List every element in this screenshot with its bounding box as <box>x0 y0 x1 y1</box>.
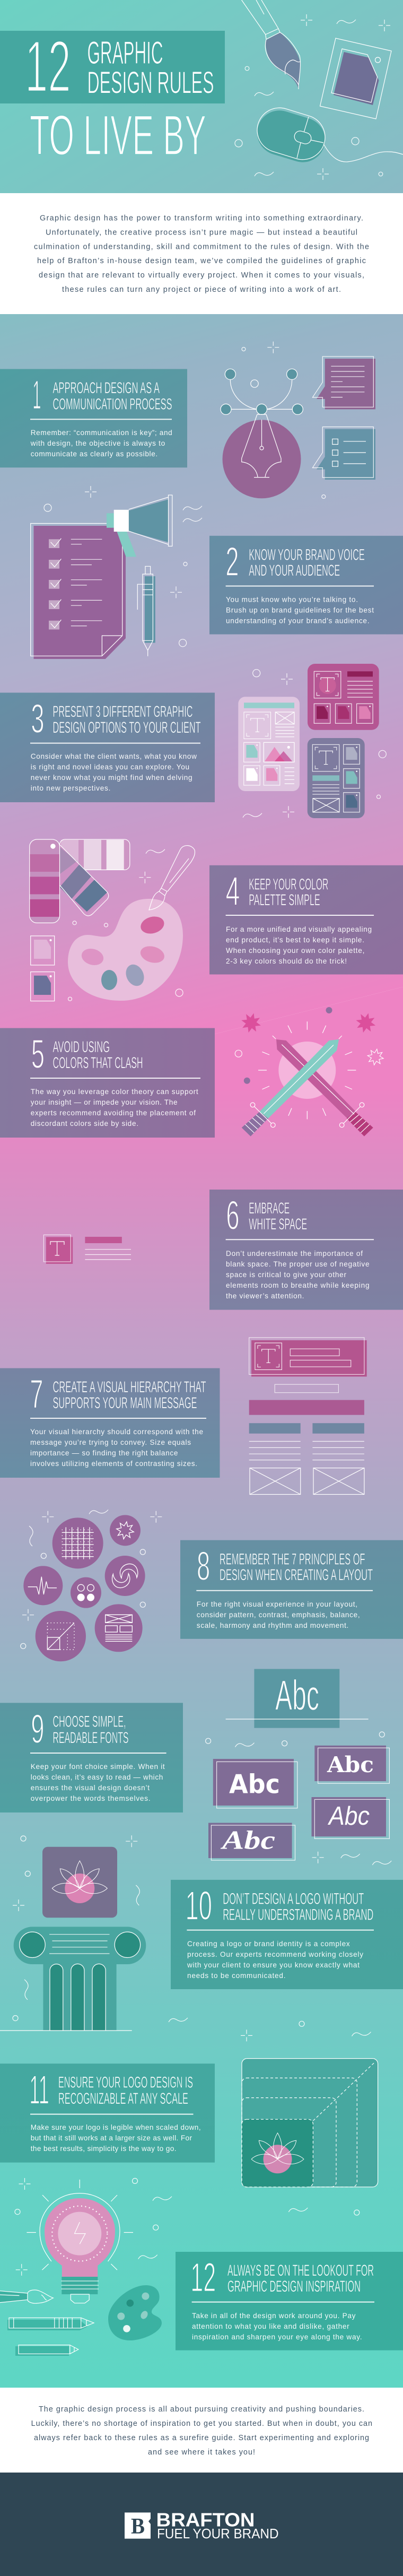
panel background <box>0 1028 215 1138</box>
panel background <box>180 1540 403 1639</box>
main gradient background, upper part <box>0 314 403 1088</box>
body text: looks clean, it’s easy to read — which <box>31 1773 163 1781</box>
icon: header paintbrush <box>242 0 301 89</box>
body text: Remember: “communication is key”; and <box>31 429 172 437</box>
heading: KEEP YOUR COLOR <box>249 875 328 894</box>
panel background <box>209 536 403 635</box>
heading: APPROACH DESIGN AS A <box>53 379 160 397</box>
icon: bottom paintbrush <box>0 2290 53 2303</box>
footer <box>0 2473 403 2576</box>
body text: space is critical to give your other <box>226 1271 346 1279</box>
heading <box>223 1890 373 1923</box>
icon: megaphone <box>107 495 172 557</box>
heading <box>53 703 200 736</box>
heading: RECOGNIZABLE AT ANY SCALE <box>58 2090 188 2107</box>
body text: is right and novel ideas you can explore. You <box>31 763 189 771</box>
title line design rules: DESIGN RULES <box>87 66 214 100</box>
number 4: 4 <box>226 869 240 914</box>
icon: pencils <box>7 2318 94 2356</box>
number 8: 8 <box>197 1543 210 1589</box>
panel background <box>209 865 403 974</box>
icon: font sample cards <box>208 1746 389 1860</box>
panel background <box>176 2252 403 2351</box>
heading: PALETTE SIMPLE <box>249 891 320 909</box>
number 12: 12 <box>190 2255 216 2301</box>
decor: header sparkles <box>235 14 390 180</box>
icon: light bulb <box>27 2180 133 2303</box>
heading <box>53 1713 128 1747</box>
icon: small swatch cards <box>31 936 55 1001</box>
decor: rule 10 sparkles <box>13 1835 371 2041</box>
heading: AVOID USING <box>53 1038 110 1056</box>
panel: rule 9 <box>0 1703 183 1812</box>
heading: DESIGN OPTIONS TO YOUR CLIENT <box>53 719 200 736</box>
title band <box>0 31 225 103</box>
body text <box>197 1600 360 1629</box>
heading <box>58 2074 193 2107</box>
main gradient background, lower part <box>0 987 403 2388</box>
body text: understanding of your brand’s audience. <box>226 617 369 625</box>
closing text: Luckily, there’s no shortage of inspiration to get you started. But when in doubt, you can <box>31 2419 372 2428</box>
heading <box>249 1200 307 1233</box>
icon: font sample cards: Abc <box>229 1770 280 1800</box>
icon: layout card light <box>238 697 300 791</box>
heading <box>220 1550 373 1584</box>
icon: header mouse <box>252 102 403 168</box>
icon: crossed pencils <box>242 1021 373 1137</box>
heading: ENSURE YOUR LOGO DESIGN IS <box>58 2074 193 2092</box>
body text <box>31 1763 165 1802</box>
icon: checklist document <box>31 523 126 659</box>
heading: CHOOSE SIMPLE, <box>53 1713 126 1731</box>
body text: Don’t underestimate the importance of <box>226 1250 363 1257</box>
heading: COLORS THAT CLASH <box>53 1054 143 1072</box>
panel background <box>0 1368 220 1478</box>
body text: needs to be communicated. <box>187 1972 285 1980</box>
body text: your insight — or impede your vision. The <box>31 1098 177 1106</box>
body text: Creating a logo or brand identity is a complex <box>187 1940 350 1948</box>
icon: seven design principles <box>23 1515 145 1661</box>
footer background <box>0 2473 403 2576</box>
decor: rule 12 sparkles <box>15 2178 172 2276</box>
closing text: and see where it takes you! <box>148 2448 255 2457</box>
closing text: The graphic design process is all about pursuing creativity and pushing boundaries. <box>39 2405 364 2414</box>
panel: rule 10 <box>171 1880 403 1989</box>
brafton tagline: FUEL YOUR BRAND <box>157 2527 279 2542</box>
panel: rule 7 <box>0 1368 220 1478</box>
body text: blank space. The proper use of negative <box>226 1260 369 1268</box>
body text: message you’re trying to convey. Size equals <box>30 1438 191 1446</box>
body text <box>226 596 374 625</box>
decor: rule 11 sparkles <box>288 2208 360 2215</box>
body text <box>31 2123 201 2153</box>
number 3: 3 <box>31 696 45 742</box>
body text: experts recommend avoiding the placement of <box>31 1109 196 1117</box>
heading: PRESENT 3 DIFFERENT GRAPHIC <box>53 703 193 721</box>
icon: lotus logo card <box>42 1847 117 1918</box>
body text: The way you leverage color theory can support <box>31 1088 198 1096</box>
intro text: Unfortunately, the creative process isn’t pure magic — but instead a beautiful <box>46 228 357 237</box>
title line graphic: GRAPHIC <box>87 35 163 71</box>
decor: stars and dots <box>235 1007 383 1084</box>
decor: rule 9 sparkles <box>206 1732 391 1865</box>
heading <box>249 547 365 579</box>
decor: rule 4 sparkles <box>68 849 183 1001</box>
number 2: 2 <box>225 539 239 585</box>
title number 12: 12 <box>25 26 71 108</box>
body text: importance — so finding the right balance <box>30 1449 178 1457</box>
icon: font sample cards: Abc <box>327 1802 370 1831</box>
body text: with design, the objective is always to <box>30 439 165 447</box>
heading: SUPPORTS YOUR MAIN MESSAGE <box>53 1394 197 1412</box>
brafton wordmark: BRAFTON <box>156 2509 255 2530</box>
panel: rule 4 <box>209 865 403 974</box>
body text <box>30 429 172 458</box>
body text: overpower the words themselves. <box>31 1794 151 1802</box>
heading: WHITE SPACE <box>249 1216 307 1233</box>
panel background <box>171 1880 403 1989</box>
body text <box>226 1250 369 1300</box>
body text: consider pattern, contrast, emphasis, balance, <box>197 1611 360 1619</box>
body text: Your visual hierarchy should correspond with the <box>30 1428 203 1436</box>
header background <box>0 0 403 193</box>
intro text: Graphic design has the power to transform writing into something extraordinary. <box>40 214 363 222</box>
intro text: help of Brafton’s in-house design team, we’ve compiled the guidelines of graphic <box>37 257 366 265</box>
closing text: always refer back to these rules as a surefire guide. Start experimenting and exploring <box>34 2434 369 2442</box>
body text: elements room to breathe while keeping <box>226 1281 369 1289</box>
heading <box>53 1378 206 1412</box>
icon: font sample cards: Abc <box>327 1752 374 1777</box>
heading: CREATE A VISUAL HIERARCHY THAT <box>53 1378 206 1396</box>
icon: scalable logo frames <box>242 2059 378 2187</box>
body text <box>226 925 372 965</box>
body text <box>187 1940 363 1980</box>
icon: large Abc sample: Abc <box>275 1671 319 1719</box>
icon: mechanical pencil <box>137 566 155 656</box>
icon: font sample cards: Abc <box>220 1825 275 1855</box>
body text: When choosing your own color palette, <box>226 947 364 955</box>
panel: rule 11: 11 <box>29 2067 49 2113</box>
number 7: 7 <box>30 1372 43 1417</box>
body text: attention to what you like and dislike, gather <box>192 2322 349 2330</box>
number 6: 6 <box>226 1193 240 1238</box>
heading <box>249 875 328 909</box>
body text: with your client to ensure you know exactly what <box>187 1961 360 1969</box>
panel: rule 6 <box>209 1190 403 1310</box>
body text <box>192 2312 362 2341</box>
title <box>0 26 225 167</box>
icon: layout card slate <box>308 738 365 818</box>
panel: rule 8 <box>180 1540 403 1639</box>
brafton logo mark <box>125 2512 151 2539</box>
body text: Take in all of the design work around you. Pay <box>192 2312 356 2320</box>
body text: Keep your font choice simple. When it <box>31 1763 165 1771</box>
icon: paint palette and brush <box>68 846 195 1001</box>
body text: You must know who you’re talking to. <box>226 596 358 604</box>
body text: into new perspectives. <box>31 784 110 792</box>
body text: involves utilizing elements of contrasting sizes. <box>30 1460 197 1468</box>
icon: speech bubble with checklist <box>312 427 375 480</box>
panel: rule 3 <box>0 693 215 802</box>
brafton logo mark: B <box>131 2514 145 2539</box>
icon: layout card pink <box>308 664 379 730</box>
panel: rule 2 <box>209 536 403 635</box>
body text: scale, harmony and rhythm and movement. <box>197 1621 348 1629</box>
icon: color swatches <box>30 839 130 923</box>
body text: process. Our experts recommend working closely <box>187 1950 363 1958</box>
body text <box>30 1428 203 1468</box>
body text: the best results, simplicity is the way to go. <box>31 2145 176 2153</box>
decor: rule 8 sparkles <box>21 1510 162 1649</box>
intro text: these rules can turn any project or piece of writing into a work of art. <box>62 285 341 294</box>
number 10: 10 <box>186 1883 212 1929</box>
panel: rule 1 <box>0 369 187 467</box>
body text: Consider what the client wants, what you know <box>31 752 197 760</box>
panel background <box>209 1190 403 1310</box>
heading <box>53 379 172 413</box>
decor: rule 2 sparkles <box>44 486 202 647</box>
body text: Make sure your logo is legible when scaled down, <box>31 2123 201 2131</box>
intro text: design that are relevant to virtually every project. When it comes to your visuals, <box>39 271 364 280</box>
body text <box>31 1088 198 1127</box>
panel background <box>0 693 215 802</box>
number 9: 9 <box>31 1706 45 1752</box>
body text: For the right visual experience in your layout, <box>197 1600 357 1608</box>
title line to live by: TO LIVE BY <box>30 103 206 167</box>
body text: never know what you might find when delving <box>31 774 192 782</box>
panel background <box>0 369 187 467</box>
number 5: 5 <box>31 1031 45 1077</box>
intro text <box>34 214 369 294</box>
decor: rule 1 sparkles <box>242 342 326 499</box>
panel: rule 1: 1 <box>32 372 41 418</box>
icon: bottom palette <box>108 2285 162 2340</box>
decor: rule 3 sparkles <box>243 670 386 818</box>
panel background <box>0 1703 183 1812</box>
body text: but that it still works at a larger size as well. For <box>31 2134 192 2142</box>
panel: rule 12 <box>176 2252 403 2351</box>
icon: greek column <box>0 1927 146 2031</box>
panel: rule 5 <box>0 1028 215 1138</box>
body text: Brush up on brand guidelines for the best <box>226 606 374 614</box>
icon: speech bubble with text <box>312 357 375 409</box>
icon: header rotated paper <box>320 38 391 119</box>
body text: end product, it’s best to keep it simple. <box>226 936 364 944</box>
intro text: culmination of understanding, skill and commitment to the rules of design. With the <box>34 242 369 251</box>
closing text <box>31 2405 372 2457</box>
heading <box>227 2262 374 2295</box>
body text: communicate as clearly as possible. <box>31 450 157 458</box>
body text: discordant colors side by side. <box>31 1120 138 1127</box>
body text <box>31 752 197 792</box>
panel: rule 11 <box>0 2063 215 2163</box>
icon: T box with text lines <box>43 1235 131 1264</box>
heading <box>53 1038 143 1072</box>
body text: 2-3 key colors should do the trick! <box>226 957 347 965</box>
body text: the viewer’s attention. <box>226 1292 304 1300</box>
heading: READABLE FONTS <box>53 1729 128 1747</box>
body text: inspiration and sharpen your eye along the way. <box>192 2333 362 2341</box>
heading: EMBRACE <box>249 1200 290 1217</box>
heading: COMMUNICATION PROCESS <box>53 395 172 413</box>
panel background <box>0 2063 215 2163</box>
body text: ensures the visual design doesn’t <box>31 1784 150 1792</box>
icon: pen tool nib <box>221 369 303 498</box>
icon: visual hierarchy wireframe <box>249 1338 367 1494</box>
body text: For a more unified and visually appealing <box>226 925 372 933</box>
icon: large Abc sample <box>226 1669 369 1728</box>
